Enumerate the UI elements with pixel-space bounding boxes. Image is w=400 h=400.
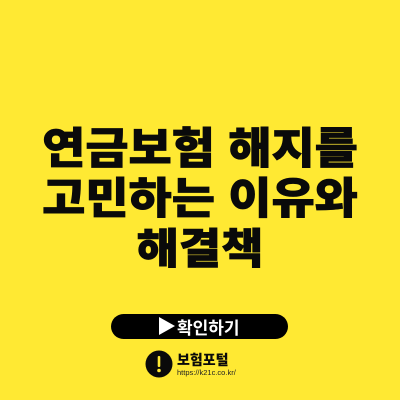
title	[42, 113, 358, 276]
brand name: 보험포털	[177, 350, 229, 370]
icon: exclamation circle	[146, 350, 172, 378]
title: 연금보험 해지를	[42, 113, 358, 176]
title: 해결책	[137, 216, 263, 276]
title: 고민하는 이유와	[42, 163, 358, 226]
button label: 확인하기	[177, 314, 240, 339]
logo	[146, 350, 236, 378]
button: confirm	[111, 314, 288, 339]
icon: play triangle	[159, 317, 175, 335]
url: https://k21c.co.kr/	[177, 368, 236, 377]
